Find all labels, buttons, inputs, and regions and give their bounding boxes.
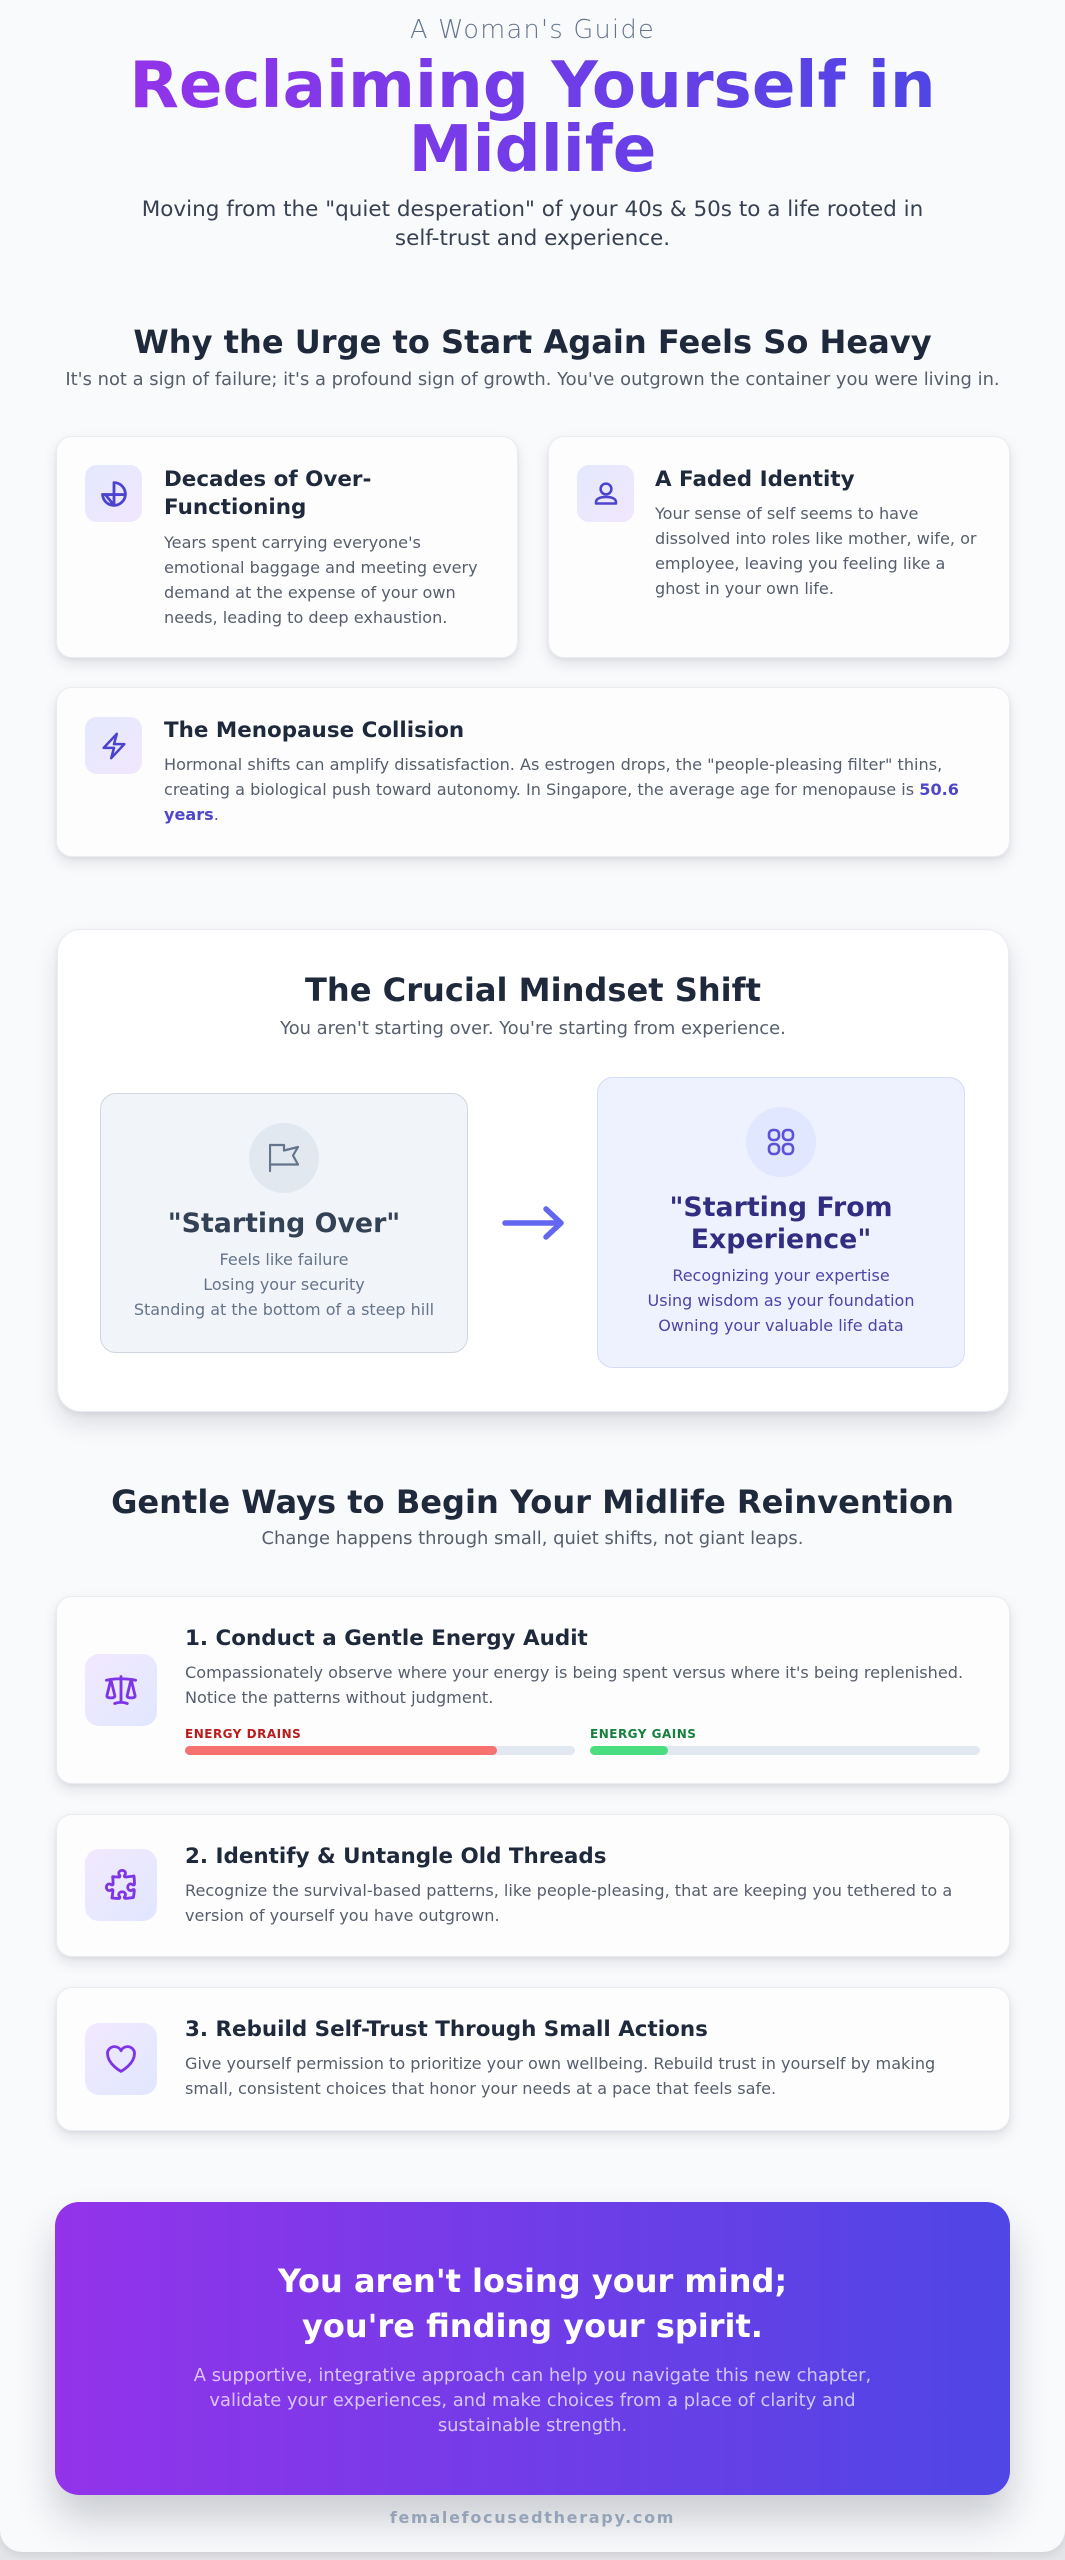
- bar track and fill: [185, 1746, 575, 1755]
- panel: step 1 energy audit: [56, 1596, 1010, 1784]
- step text: Recognize the survival-based patterns, like people-pleasing, that are keeping you tethered to a: [185, 1881, 952, 1900]
- card text: demand at the expense of your own: [164, 583, 456, 602]
- box title: [669, 1192, 893, 1255]
- step title: 2. Identify & Untangle Old Threads: [185, 1844, 606, 1869]
- icon: heart: [85, 2023, 157, 2095]
- card text: dissolved into roles like mother, wife, or: [655, 529, 977, 548]
- heading: The Crucial Mindset Shift: [305, 971, 761, 1009]
- bar track and fill: [590, 1746, 980, 1755]
- section subheading: It's not a sign of failure; it's a profound sign of growth. You've outgrown the container you were living in.: [65, 369, 1000, 390]
- card title: Decades of Over-: [164, 467, 371, 492]
- card title: The Menopause Collision: [164, 718, 464, 743]
- panel: decades of over-functioning: [56, 436, 518, 658]
- box title: Experience": [691, 1224, 871, 1255]
- arrow: [502, 1206, 564, 1240]
- panel: a faded identity: [548, 436, 1010, 658]
- card text: emotional baggage and meeting every: [164, 558, 478, 577]
- card title: [164, 467, 371, 520]
- card text: Your sense of self seems to have: [655, 504, 918, 523]
- box text: Losing your security: [203, 1275, 365, 1294]
- title: [120, 54, 945, 182]
- title: Reclaiming Yourself in: [129, 48, 936, 123]
- panel: step 3 self-trust: [56, 1987, 1010, 2131]
- callout text: [194, 2365, 871, 2436]
- section heading: gentle ways: Gentle Ways to Begin Your Midlife Reinvention: [111, 1483, 954, 1521]
- callout text: A supportive, integrative approach can help you navigate this new chapter,: [194, 2365, 871, 2386]
- box text: [134, 1250, 434, 1319]
- icon: puzzle piece: [85, 1849, 157, 1921]
- step title: 1. Conduct a Gentle Energy Audit: [185, 1626, 588, 1651]
- card text: Hormonal shifts can amplify dissatisfaction. As estrogen drops, the "people-pleasing filter" thins,: [164, 755, 942, 774]
- card text: creating a biological push toward autonomy. In Singapore, the average age for menopause is 50.6: [164, 780, 959, 799]
- callout: closing message: [55, 2202, 1010, 2495]
- comparison box: starting over: [100, 1093, 468, 1353]
- callout heading: You aren't losing your mind;: [278, 2262, 787, 2300]
- box text: Owning your valuable life data: [658, 1316, 904, 1335]
- icon: pie chart: [85, 465, 142, 522]
- callout heading: [278, 2262, 787, 2345]
- panel: the menopause collision: [56, 687, 1010, 857]
- card title: A Faded Identity: [655, 467, 855, 492]
- bar: energy gains: [590, 1727, 980, 1755]
- card text: employee, leaving you feeling like a: [655, 554, 945, 573]
- panel: the crucial mindset shift: [57, 929, 1009, 1412]
- box text: Using wisdom as your foundation: [648, 1291, 914, 1310]
- callout text: sustainable strength.: [438, 2415, 627, 2436]
- box title: "Starting From: [669, 1192, 893, 1223]
- section heading: why the urge feels heavy: Why the Urge to Start Again Feels So Heavy: [133, 323, 932, 361]
- comparison box: starting from experience: [597, 1077, 965, 1368]
- icon: scales: [85, 1654, 157, 1726]
- subtitle: Moving from the "quiet desperation" of your 40s & 50s to a life rooted in: [142, 197, 923, 222]
- card title: Functioning: [164, 495, 306, 520]
- card text: [655, 504, 977, 598]
- section subheading: Change happens through small, quiet shifts, not giant leaps.: [262, 1528, 803, 1549]
- icon: person: [577, 465, 634, 522]
- bar label: ENERGY DRAINS: [185, 1727, 301, 1741]
- callout text: validate your experiences, and make choices from a place of clarity and: [209, 2390, 856, 2411]
- icon: bolt: [85, 717, 142, 774]
- step text: Give yourself permission to prioritize your own wellbeing. Rebuild trust in yourself by making: [185, 2054, 935, 2073]
- panel: step 2 old threads: [56, 1814, 1010, 1957]
- step text: version of yourself you have outgrown.: [185, 1906, 500, 1925]
- eyebrow: A Woman's Guide: A Woman's Guide: [410, 15, 655, 45]
- box text: Recognizing your expertise: [672, 1266, 890, 1285]
- box text: Feels like failure: [220, 1250, 348, 1269]
- card text: [164, 755, 959, 824]
- card text: [164, 533, 478, 627]
- step title: 3. Rebuild Self-Trust Through Small Actions: [185, 2017, 708, 2042]
- footer: website: femalefocusedtherapy.com: [390, 2508, 675, 2527]
- box text: Standing at the bottom of a steep hill: [134, 1300, 434, 1319]
- step text: small, consistent choices that honor your needs at a pace that feels safe.: [185, 2079, 776, 2098]
- title: Midlife: [409, 112, 656, 187]
- step text: [185, 1881, 952, 1925]
- bar label: ENERGY GAINS: [590, 1727, 696, 1741]
- icon: grid of squares: [746, 1107, 816, 1177]
- subtitle: [142, 197, 923, 251]
- step text: Compassionately observe where your energy is being spent versus where it's being replenished.: [185, 1663, 963, 1682]
- subheading: You aren't starting over. You're starting from experience.: [280, 1018, 786, 1039]
- box text: [648, 1266, 914, 1335]
- step text: [185, 1663, 963, 1707]
- callout heading: you're finding your spirit.: [302, 2307, 763, 2345]
- bar: energy drains: [185, 1727, 575, 1755]
- subtitle: self-trust and experience.: [395, 226, 670, 251]
- step text: Notice the patterns without judgment.: [185, 1688, 493, 1707]
- card text: ghost in your own life.: [655, 579, 834, 598]
- step text: [185, 2054, 935, 2098]
- card text: Years spent carrying everyone's: [164, 533, 421, 552]
- card text: needs, leading to deep exhaustion.: [164, 608, 447, 627]
- card text: years.: [164, 805, 219, 824]
- icon: flag: [249, 1123, 319, 1193]
- box title: "Starting Over": [168, 1208, 400, 1239]
